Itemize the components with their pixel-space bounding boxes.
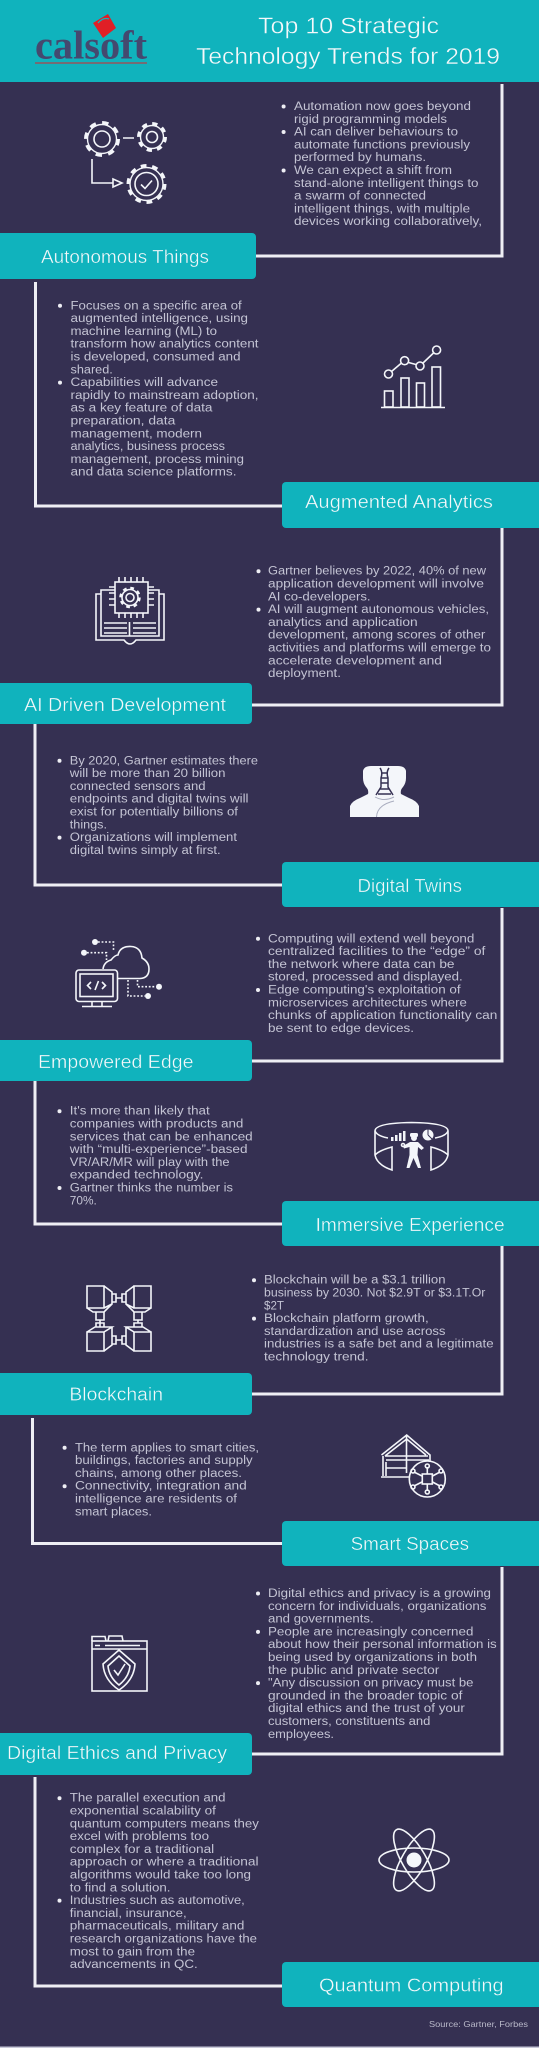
connector: [35, 724, 290, 885]
text: Augmented Analytics bullets: [58, 300, 259, 479]
text: Digital Ethics and Privacy bullets: People are increasingly concerned: [268, 1626, 473, 1638]
text: Digital Twins bullets: [58, 755, 258, 857]
text: Quantum Computing bullets: most to gain from the: [70, 1946, 195, 1958]
label: Quantum Computing: Quantum Computing: [319, 1976, 504, 1996]
label: Smart Spaces: Smart Spaces: [351, 1534, 469, 1554]
label: Immersive Experience: Immersive Experience: [316, 1215, 505, 1235]
text: Smart Spaces bullets: The term applies to smart cities,: [75, 1442, 259, 1454]
text: AI Driven Development bullets: [256, 566, 491, 680]
icon: person in immersive VR ring: [375, 1122, 448, 1170]
text: Smart Spaces bullets: smart places.: [75, 1506, 152, 1518]
text: Digital Ethics and Privacy bullets: about how their personal information is: [268, 1639, 497, 1651]
text: Immersive Experience bullets: It's more than likely that: [70, 1106, 211, 1118]
text: AI Driven Development bullets: AI co-developers.: [268, 591, 371, 603]
text: Autonomous Things bullets: performed by humans.: [294, 152, 426, 164]
text: Augmented Analytics bullets: management, process mining: [70, 454, 244, 466]
title: Technology Trends for 2019: [196, 43, 500, 69]
connector: [250, 84, 502, 256]
text: Smart Spaces bullets: intelligence are residents of: [75, 1494, 238, 1506]
label: Empowered Edge: Empowered Edge: [38, 1052, 194, 1072]
text: Empowered Edge bullets: Edge computing's exploitation of: [268, 984, 462, 996]
text: Empowered Edge bullets: stored, processed and displayed.: [268, 972, 463, 984]
text: Quantum Computing bullets: to find a solution.: [70, 1882, 170, 1894]
text: Autonomous Things bullets: rigid programming models: [294, 114, 447, 126]
text: Quantum Computing bullets: approach or where a traditional: [70, 1857, 258, 1869]
text: Empowered Edge bullets: be sent to edge devices.: [268, 1023, 414, 1035]
connector: [250, 1567, 502, 1754]
text: Empowered Edge bullets: the network where data can be: [268, 959, 454, 971]
text: Digital Ethics and Privacy bullets: concern for individuals, organizations: [268, 1601, 487, 1613]
text: Digital Ethics and Privacy bullets: being used by organizations in both: [268, 1652, 477, 1664]
text: Immersive Experience bullets: expanded technology.: [70, 1170, 204, 1182]
text: Autonomous Things bullets: stand-alone intelligent things to: [294, 178, 478, 190]
panel: Digital Twins: [35, 724, 539, 907]
text: Smart Spaces bullets: [63, 1442, 259, 1518]
text: Digital Ethics and Privacy bullets: and governments.: [268, 1614, 374, 1626]
text: Immersive Experience bullets: companies with products and: [70, 1118, 243, 1130]
icon: smart house with chip: [381, 1435, 445, 1497]
label: Digital Twins: [282, 862, 539, 907]
label: Augmented Analytics: [282, 482, 539, 528]
text: Smart Spaces bullets: chains, among other places.: [75, 1468, 242, 1480]
label: Immersive Experience: [282, 1201, 539, 1246]
text: Blockchain bullets: Blockchain platform growth,: [264, 1313, 429, 1325]
text: Blockchain bullets: technology trend.: [264, 1352, 368, 1364]
text: Empowered Edge bullets: Computing will extend well beyond: [268, 933, 474, 945]
text: Blockchain bullets: [252, 1275, 494, 1364]
icon: shield in browser window: [92, 1636, 147, 1691]
icon: gears with check: [86, 122, 166, 202]
text: Digital Ethics and Privacy bullets: "Any discussion on privacy must be: [268, 1678, 473, 1690]
icon: chip in open book: [96, 577, 164, 644]
text: AI Driven Development bullets: application development will involve: [268, 578, 484, 590]
text: Quantum Computing bullets: excel with problems too: [70, 1831, 209, 1843]
connector: [250, 1246, 502, 1394]
text: Augmented Analytics bullets: as a key feature of data: [70, 403, 213, 415]
text: Quantum Computing bullets: The parallel execution and: [70, 1793, 226, 1805]
text: Digital Twins bullets: connected sensors and: [70, 781, 206, 793]
header band: [0, 0, 539, 82]
text: Augmented Analytics bullets: Focuses on a specific area of: [70, 300, 243, 312]
label: Blockchain: Blockchain: [69, 1385, 163, 1405]
icon: bar chart with trend line: [381, 346, 445, 408]
text: Digital Ethics and Privacy bullets: employees.: [268, 1729, 334, 1741]
label: Empowered Edge: [0, 1040, 252, 1081]
connector: [35, 1081, 290, 1224]
label: Quantum Computing: [282, 1962, 539, 2007]
icon: four linked blocks: [87, 1286, 151, 1351]
label: AI Driven Development: [0, 683, 252, 724]
logo: calsoft: calsoft: [35, 22, 148, 68]
text: AI Driven Development bullets: Gartner believes by 2022, 40% of new: [268, 566, 487, 578]
text: AI Driven Development bullets: activities and platforms will emerge to: [268, 642, 491, 654]
text: Augmented Analytics bullets: rapidly to mainstream adoption,: [70, 390, 258, 402]
text: Empowered Edge bullets: centralized facilities to the “edge” of: [268, 946, 486, 958]
text: Autonomous Things bullets: devices working collaboratively,: [294, 216, 482, 228]
text: Quantum Computing bullets: exponential scalability of: [70, 1806, 217, 1818]
text: AI Driven Development bullets: analytics and application: [268, 617, 418, 629]
text: Augmented Analytics bullets: and data science platforms.: [70, 467, 236, 479]
panel: Empowered Edge: [0, 908, 502, 1081]
source note: Source: Gartner, Forbes: [429, 2019, 528, 2029]
text: Blockchain bullets: $2T: [264, 1300, 284, 1312]
text: Augmented Analytics bullets: Capabilities will advance: [70, 377, 218, 389]
panel: Quantum Computing: [35, 1777, 539, 2007]
text: Quantum Computing bullets: financial, insurance,: [70, 1908, 187, 1920]
icon: twin silhouettes with DNA: [350, 766, 419, 817]
text: Augmented Analytics bullets: preparation, data: [70, 416, 176, 428]
text: Immersive Experience bullets: with “multi-experience”-based: [69, 1144, 248, 1156]
label: Smart Spaces: [282, 1521, 539, 1566]
text: Quantum Computing bullets: pharmaceuticals, military and: [70, 1921, 244, 1933]
text: Quantum Computing bullets: quantum computers means they: [70, 1818, 259, 1830]
label: Autonomous Things: Autonomous Things: [41, 247, 209, 267]
label: Blockchain: [0, 1373, 252, 1415]
panel: Digital Ethics and Privacy: [0, 1567, 502, 1775]
text: Digital Twins bullets: digital twins simply at first.: [70, 845, 221, 857]
text: Smart Spaces bullets: Connectivity, integration and: [75, 1481, 247, 1493]
panel: Immersive Experience: [35, 1081, 539, 1246]
text: Digital Twins bullets: things.: [70, 819, 107, 831]
text: Smart Spaces bullets: buildings, factories and supply: [75, 1455, 253, 1467]
connector: [250, 528, 502, 705]
text: Augmented Analytics bullets: augmented intelligence, using: [70, 313, 248, 325]
text: AI Driven Development bullets: deployment.: [268, 668, 341, 680]
panel: Blockchain: [0, 1246, 502, 1415]
label: Digital Ethics and Privacy: [0, 1733, 252, 1775]
text: Augmented Analytics bullets: management, modern: [70, 428, 202, 440]
label: Digital Twins: Digital Twins: [358, 876, 462, 896]
text: Immersive Experience bullets: 70%.: [70, 1195, 97, 1207]
text: Autonomous Things bullets: automate functions previously: [294, 139, 470, 151]
text: Digital Ethics and Privacy bullets: the public and private sector: [268, 1665, 439, 1677]
text: Empowered Edge bullets: chunks of application functionality can: [268, 1010, 497, 1022]
text: AI Driven Development bullets: development, among scores of other: [268, 630, 486, 642]
text: Autonomous Things bullets: We can expect a shift from: [294, 165, 452, 177]
text: Digital Twins bullets: Organizations will implement: [70, 832, 238, 844]
text: Quantum Computing bullets: research organizations have the: [70, 1934, 257, 1946]
text: Augmented Analytics bullets: transform how analytics content: [70, 339, 259, 351]
icon: code monitor and cloud: [76, 939, 162, 1006]
text: Immersive Experience bullets: [58, 1106, 253, 1207]
connector: [36, 282, 290, 506]
text: Quantum Computing bullets: complex for a traditional: [70, 1844, 214, 1856]
text: Digital Twins bullets: By 2020, Gartner estimates there: [70, 755, 258, 767]
label: Digital Ethics and Privacy: Digital Ethics and Privacy: [7, 1743, 227, 1763]
label: AI Driven Development: AI Driven Development: [24, 695, 226, 715]
text: Blockchain bullets: standardization and use across: [264, 1326, 446, 1338]
text: Augmented Analytics bullets: shared.: [70, 364, 113, 376]
text: Digital Twins bullets: will be more than 20 billion: [69, 768, 226, 780]
icon: atom: [379, 1824, 449, 1896]
connector: [250, 908, 502, 1061]
text: Augmented Analytics bullets: is developed, consumed and: [70, 352, 240, 364]
text: Quantum Computing bullets: [58, 1793, 259, 1971]
text: Autonomous Things bullets: intelligent things, with multiple: [294, 203, 470, 215]
text: Blockchain bullets: business by 2030. Not $2.9T or $3.1T.Or: [264, 1288, 486, 1300]
text: Augmented Analytics bullets: machine learning (ML) to: [70, 326, 217, 338]
text: Digital Ethics and Privacy bullets: [256, 1588, 497, 1741]
title: [196, 12, 500, 69]
text: Autonomous Things bullets: AI can deliver behaviours to: [294, 127, 458, 139]
text: Immersive Experience bullets: VR/AR/MR will play with the: [70, 1157, 230, 1169]
text: Digital Ethics and Privacy bullets: customers, constituents and: [268, 1716, 430, 1728]
panel: AI Driven Development: [0, 528, 502, 724]
connector: [35, 1777, 290, 1986]
text: Autonomous Things bullets: a swarm of connected: [294, 191, 426, 203]
text: Digital Ethics and Privacy bullets: Digital ethics and privacy is a growing: [268, 1588, 491, 1600]
text: Quantum Computing bullets: advancements in QC.: [70, 1959, 198, 1971]
label: Augmented Analytics: Augmented Analytics: [305, 492, 493, 512]
text: Autonomous Things bullets: [282, 101, 482, 228]
text: Digital Ethics and Privacy bullets: digital ethics and the trust of your: [268, 1703, 465, 1715]
text: Augmented Analytics bullets: analytics, business process: [70, 441, 225, 453]
text: Empowered Edge bullets: microservices architectures where: [268, 997, 467, 1009]
text: Immersive Experience bullets: Gartner thinks the number is: [70, 1182, 233, 1194]
text: Digital Ethics and Privacy bullets: grounded in the broader topic of: [268, 1690, 463, 1702]
panel: Smart Spaces: [32, 1418, 539, 1566]
text: Digital Twins bullets: exist for potentially billions of: [70, 806, 239, 818]
text: AI Driven Development bullets: accelerate development and: [268, 655, 442, 667]
text: Quantum Computing bullets: Industries such as automotive,: [70, 1895, 245, 1907]
text: Quantum Computing bullets: algorithms would take too long: [70, 1870, 251, 1882]
text: Blockchain bullets: industries is a safe bet and a legitimate: [264, 1339, 494, 1351]
panel: Autonomous Things: [0, 84, 502, 279]
text: Blockchain bullets: Blockchain will be a $3.1 trillion: [264, 1275, 446, 1287]
text: AI Driven Development bullets: AI will augment autonomous vehicles,: [268, 604, 489, 616]
label: Autonomous Things: [0, 233, 256, 279]
text: Immersive Experience bullets: services that can be enhanced: [70, 1131, 253, 1143]
panel: Augmented Analytics: [36, 282, 539, 528]
text: Empowered Edge bullets: [256, 933, 497, 1035]
title: Top 10 Strategic: [258, 12, 439, 38]
connector: [32, 1418, 290, 1544]
text: Autonomous Things bullets: Automation now goes beyond: [294, 101, 471, 113]
text: Digital Twins bullets: endpoints and digital twins will: [70, 794, 248, 806]
